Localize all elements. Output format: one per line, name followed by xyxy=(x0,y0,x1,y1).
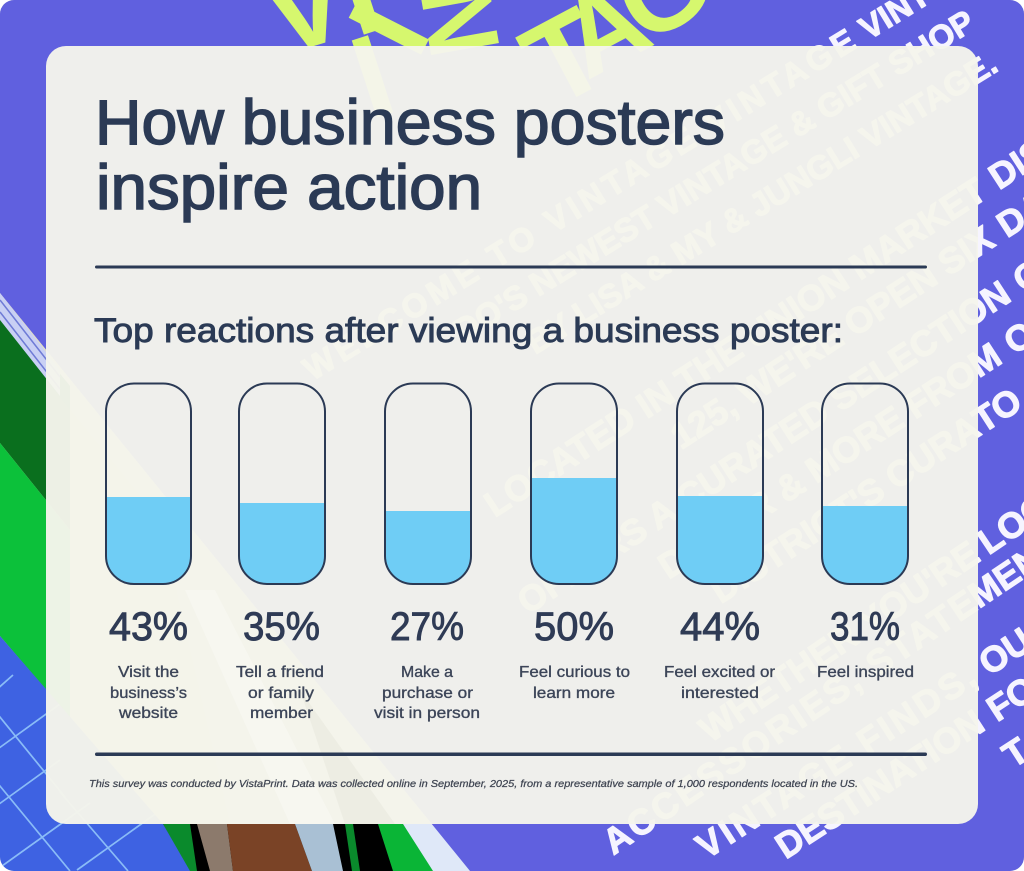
bar: tell a friend 35%: member xyxy=(250,705,314,722)
bar: make a purchase 27%: Make a xyxy=(401,664,453,681)
bar: make a purchase 27% xyxy=(374,384,480,722)
poster white body text: OFFERS A CURATED SELECTION xyxy=(510,272,1017,622)
bar: feel inspired 31%: Feel inspired xyxy=(817,664,914,681)
title xyxy=(95,88,725,223)
poster white body text: DO'S NEWEST VINTAGE & GIFT SHOP xyxy=(447,2,981,349)
poster white body text: ACCESSORIES, STATE xyxy=(595,582,983,862)
poster white body text: WHETHER YOU'RE xyxy=(692,533,986,750)
poster white body text: DÉCOR & MORE FROM xyxy=(651,334,1008,587)
title: How business posters xyxy=(95,88,725,158)
poster white body text: WELCOME TO VINTAGE VINTAGE xyxy=(297,21,862,387)
poster page edges xyxy=(0,293,46,378)
chart: top reactions xyxy=(106,384,914,722)
poster white body text xyxy=(607,0,1024,859)
bar: tell a friend 35%: or family xyxy=(248,685,314,702)
bar: feel inspired 31%: 31% xyxy=(830,605,900,649)
poster lime heading: I xyxy=(337,9,409,145)
footnote: This survey was conducted by VistaPrint. Data was collected online in September, 2025, from a representative sample of 1,000 respondents located in the US. xyxy=(89,778,858,790)
title: inspire action xyxy=(96,153,482,223)
bar: feel excited 44%: interested xyxy=(681,685,759,702)
bar: feel excited 44%: 44% xyxy=(680,605,760,649)
bar: feel curious 50% xyxy=(519,384,630,702)
bar: tell a friend 35%: 35% xyxy=(243,605,320,649)
bar: visit website 43%: 43% xyxy=(109,605,188,649)
bar: make a purchase 27%: purchase or xyxy=(382,685,474,702)
poster white body text: 125, WE'RE OPEN SIX xyxy=(663,217,1001,457)
poster white body text: LOCATED IN THE UNION MARKET xyxy=(477,169,993,525)
light streaks showing through panel xyxy=(46,380,395,824)
bar: tell a friend 35%: Tell a friend xyxy=(236,664,324,681)
bar: feel excited 44% xyxy=(664,384,776,702)
bar: feel curious 50%: learn more xyxy=(533,685,615,702)
bar: visit website 43% xyxy=(106,384,191,722)
blue grid poster xyxy=(0,636,190,871)
poster white body text: DISTRICT'S CURA xyxy=(703,406,987,611)
bright green poster xyxy=(0,443,46,689)
poster white body text: BY LISA & MY & JUNGLI VINTAGE. xyxy=(519,44,1004,361)
poster white body text: DESTINATION xyxy=(768,701,991,866)
bar: tell a friend 35% xyxy=(236,384,325,722)
bar: visit website 43%: Visit the xyxy=(118,664,179,681)
bar: visit website 43%: business’s xyxy=(110,685,187,702)
subtitle: Top reactions after viewing a business poster: xyxy=(94,312,843,350)
poster white body text: VINTAGE FINDS, xyxy=(688,655,983,867)
dark green poster edge xyxy=(0,320,46,500)
poster lime heading xyxy=(272,0,706,46)
bar: feel curious 50%: 50% xyxy=(534,605,614,649)
bar: make a purchase 27%: visit in person xyxy=(374,705,480,722)
bar: feel excited 44%: Feel excited or xyxy=(664,664,776,681)
bar: visit website 43%: website xyxy=(118,705,178,722)
bar: feel inspired 31% xyxy=(817,384,914,681)
bar: make a purchase 27%: 27% xyxy=(390,605,464,649)
bottom strip objects xyxy=(160,824,485,871)
bar: feel curious 50%: Feel curious to xyxy=(519,664,630,681)
